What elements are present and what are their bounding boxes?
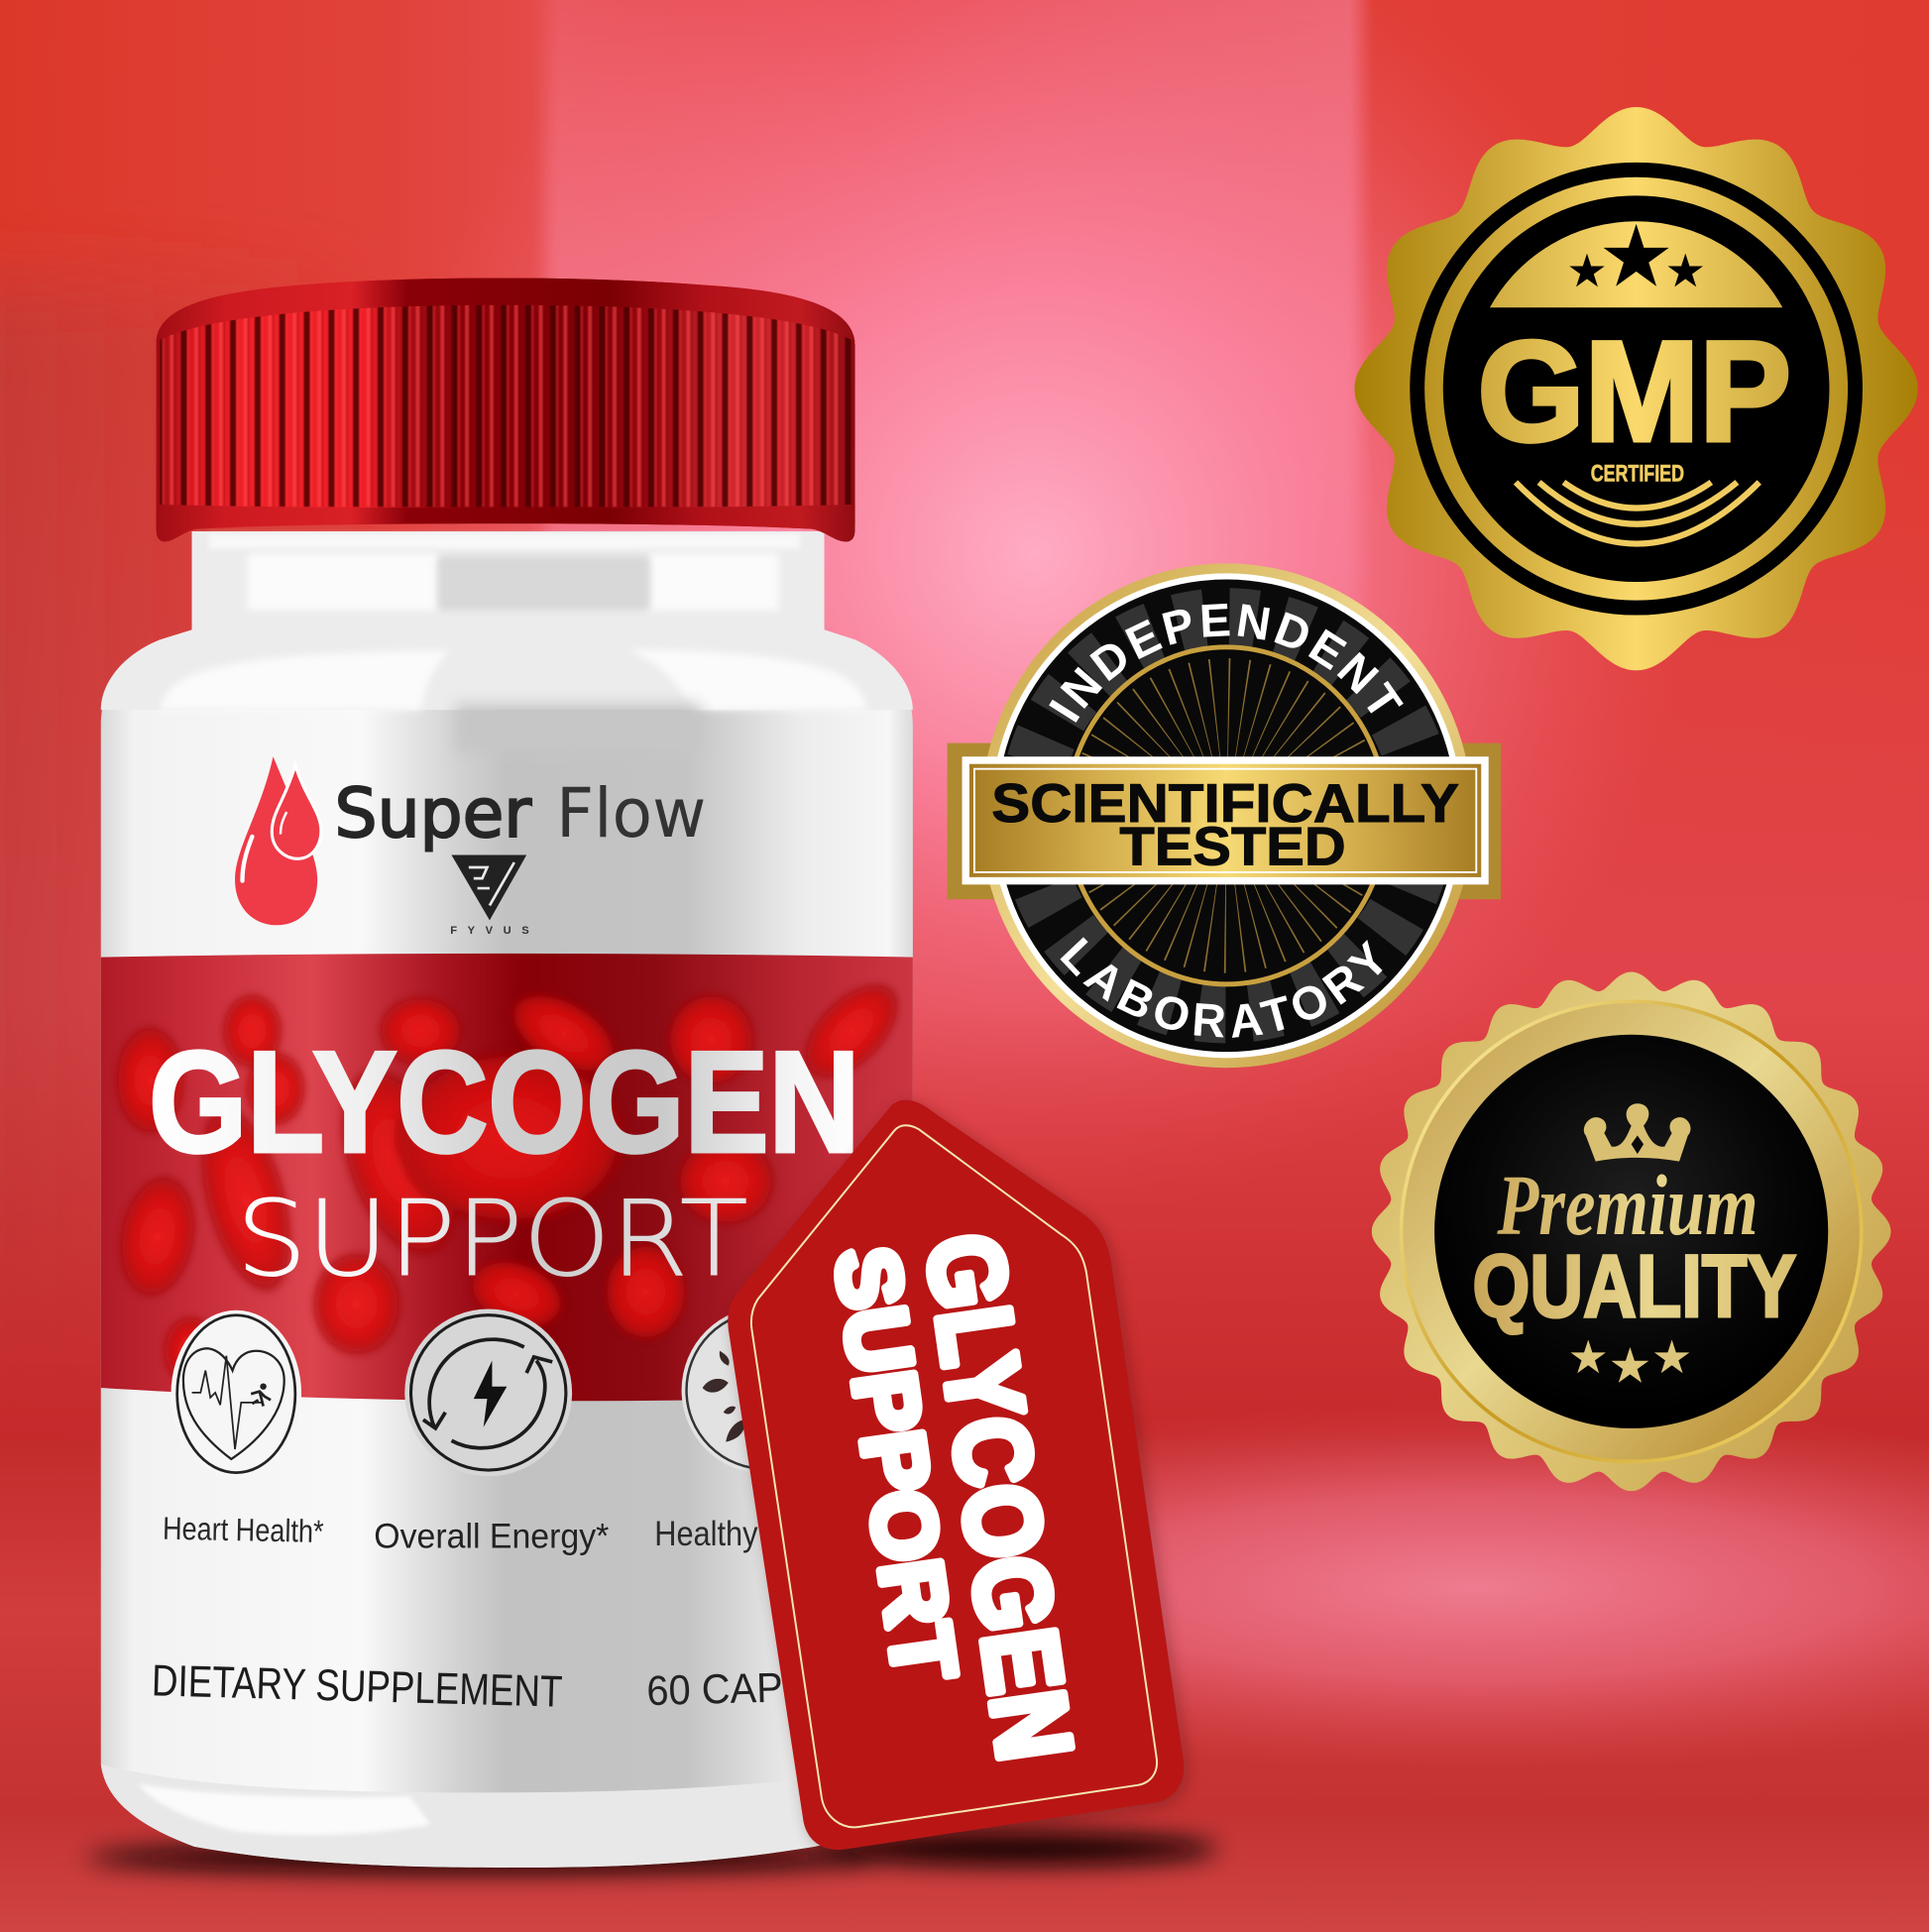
banner text line 1: SCIENTIFICALLY <box>991 773 1459 834</box>
brand name: Super <box>335 775 532 853</box>
cap top lip <box>157 278 855 342</box>
icon: blood drops <box>235 756 321 925</box>
gold outer ring <box>980 563 1473 1068</box>
neck and shoulder shading <box>101 531 913 1868</box>
blood cells <box>110 966 916 1385</box>
bottle ground shadow <box>86 1833 1218 1873</box>
badge: scientifically tested <box>948 563 1538 1069</box>
black outer ring <box>1410 163 1863 616</box>
cap ridged wall <box>157 278 855 541</box>
quality text: QUALITY <box>1473 1236 1796 1335</box>
caption: Healthy: Healthy <box>654 1516 758 1553</box>
label top logo <box>235 756 706 937</box>
icon: Fyvus logo <box>451 855 526 920</box>
banner white frame <box>963 756 1489 884</box>
product bottle <box>101 278 916 1868</box>
tag body <box>728 1100 1184 1850</box>
premium script text: Premium <box>1497 1158 1758 1253</box>
icon: crown <box>1584 1103 1691 1162</box>
bottom section <box>101 1764 913 1868</box>
tag shadow <box>732 1103 1188 1854</box>
curved lines <box>1516 483 1759 544</box>
scalloped gold seal <box>1372 971 1891 1491</box>
caption: Heart Health: Heart Health* <box>163 1511 324 1549</box>
black inner disc <box>1443 195 1829 582</box>
white ring <box>990 573 1463 1058</box>
independent arc text: INDEPENDENT <box>1049 603 1404 723</box>
GMP text: GMP <box>1478 311 1791 471</box>
banner text line 2: TESTED <box>1119 816 1346 876</box>
cap ridges <box>160 302 851 507</box>
icon: healthy leaves <box>682 1307 849 1474</box>
tag inner stitch line <box>751 1125 1157 1827</box>
icon: overall energy <box>404 1309 572 1476</box>
banner gold plate <box>969 764 1481 877</box>
caption: 60 Caps: 60 CAPS <box>646 1663 810 1714</box>
inner gold ring <box>1067 647 1387 984</box>
grey ring segments <box>1030 619 1423 1012</box>
tag title: GLYCOGEN: GLYCOGEN <box>904 1227 1095 1767</box>
stars <box>1569 224 1703 286</box>
hang tag <box>728 1100 1188 1854</box>
red label band <box>101 954 916 1401</box>
gold dome <box>1490 221 1782 307</box>
scalloped gold seal <box>1341 98 1929 689</box>
caption: Dietary Supplement: DIETARY SUPPLEMENT <box>151 1656 563 1717</box>
caption: Overall Energy: Overall Energy* <box>374 1518 609 1555</box>
icon: heart health <box>171 1310 301 1478</box>
bottle body <box>101 531 913 1868</box>
product name: SUPPORT: SUPPORT <box>236 1178 748 1300</box>
brand name second word: Flow <box>556 775 706 853</box>
gold ring <box>1424 177 1848 601</box>
product name: GLYCOGEN: GLYCOGEN <box>149 1022 860 1183</box>
tag title: SUPPORT: SUPPORT <box>817 1241 975 1686</box>
banner back tabs <box>948 743 1501 899</box>
stars <box>1571 1340 1689 1383</box>
badge: GMP certified <box>1341 98 1929 689</box>
gold line ring <box>1402 1001 1862 1461</box>
bottle cap <box>157 278 855 541</box>
certified text: CERTIFIED <box>1591 460 1684 486</box>
black disc <box>1434 1035 1828 1428</box>
Fyvus text: FYVUS <box>450 925 529 937</box>
badge: premium quality <box>1372 971 1891 1491</box>
cap bottom rim <box>157 505 855 541</box>
gold rays <box>1128 718 1325 914</box>
laboratory arc text: LABORATORY <box>1061 937 1383 1038</box>
